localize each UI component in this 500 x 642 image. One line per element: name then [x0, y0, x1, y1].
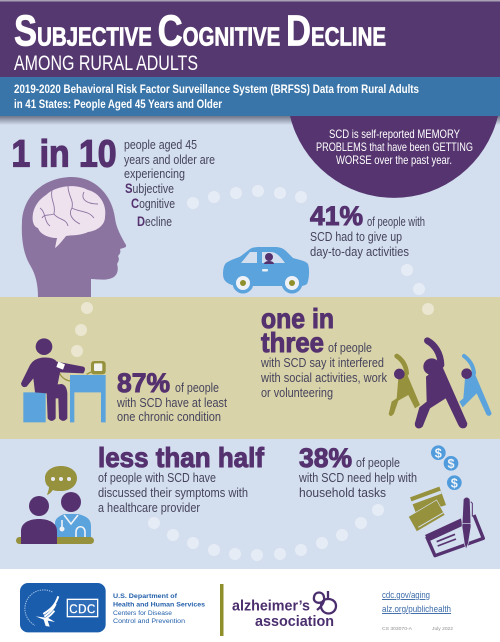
footer: CDC logo — [20, 583, 106, 632]
footer: links: cdc.gov/aging — [382, 590, 430, 601]
footer: Alzheimer's Association logo — [232, 591, 336, 630]
icon: three people stretching — [389, 341, 492, 429]
icon: head with brain — [22, 177, 126, 297]
stat: 1 in 10: 1 in 10 — [12, 134, 116, 176]
stat: less than half: a healthcare provider — [98, 500, 201, 515]
stat: one in three: with SCD say it interfered — [260, 355, 384, 370]
stat: 38 percent: of people — [356, 455, 400, 470]
footer: HHS text: Centers for Disease — [113, 610, 172, 617]
callout: SCD definition — [290, 116, 498, 198]
stat: one in three: of people — [328, 340, 372, 355]
callout: SCD definition: WORSE over the past year. — [336, 153, 452, 167]
stat: one in three: with social activities, work — [260, 370, 387, 385]
band: tan middle section — [0, 297, 500, 439]
stat: one in three: one in — [261, 303, 334, 334]
stat: 87 percent: one chronic condition — [117, 409, 221, 424]
footer: HHS text: Control and Prevention — [113, 618, 185, 625]
footer: HHS text — [113, 593, 205, 625]
subtitle band: in 41 States: People Aged 45 Years and Older — [14, 99, 222, 111]
stat: 38 percent — [298, 443, 417, 500]
stat: 1 in 10 — [12, 134, 215, 229]
stat: 1 in 10: Decline — [137, 213, 172, 229]
stat: 1 in 10: years and older are — [124, 152, 215, 167]
stat: 1 in 10: experiencing — [124, 166, 185, 181]
icon: car with driver — [223, 247, 309, 294]
stat: one in three — [260, 303, 387, 400]
stat: less than half: less than half — [98, 442, 265, 473]
icon: person with blood pressure monitor — [21, 338, 106, 422]
stat: 41 percent: of people with — [367, 214, 425, 229]
stat: 1 in 10: people aged 45 — [124, 137, 197, 152]
stat: less than half: discussed their symptoms with — [98, 485, 248, 500]
stat: 1 in 10: Cognitive — [131, 195, 175, 211]
stat: 41 percent — [310, 201, 425, 259]
stat: less than half: of people with SCD have — [98, 470, 216, 485]
icon: coins, cards, checkbook and pen: $ — [451, 476, 458, 490]
stat: 1 in 10: Subjective — [125, 180, 174, 196]
stat: 87 percent — [116, 368, 227, 424]
stat: 41 percent: SCD had to give up — [310, 229, 402, 244]
dotted path decoration — [71, 185, 434, 561]
stat: 38 percent: with SCD need help with — [298, 470, 417, 485]
subtitle band: 2019-2020 Behavioral Risk Factor Surveillance System (BRFSS) Data from Rural Adults — [14, 84, 419, 96]
stat: 38 percent: 38% — [299, 443, 352, 473]
subtitle band — [0, 77, 500, 116]
icon: coins, cards, checkbook and pen — [408, 445, 483, 556]
stat: 87 percent: of people — [175, 380, 219, 395]
icon: coins, cards, checkbook and pen: $ — [447, 457, 455, 471]
footer: links: July 2022 — [432, 626, 454, 631]
stat: 41 percent: 41% — [310, 201, 363, 231]
footer: links — [382, 590, 454, 631]
icon: patient and doctor talking — [16, 466, 94, 544]
stat: 38 percent: household tasks — [299, 485, 386, 500]
footer: links: CS 303070-A — [382, 626, 412, 631]
footer: HHS text: Health and Human Services — [113, 602, 205, 608]
stat: 87 percent: with SCD have at least — [116, 395, 227, 410]
footer: HHS text: U.S. Department of — [113, 593, 178, 600]
stat: one in three: or volunteering — [261, 385, 333, 400]
header: purple title banner: AMONG RURAL ADULTS — [14, 52, 198, 75]
footer: CDC logo: CDC — [69, 601, 96, 617]
header: purple title banner — [0, 0, 500, 77]
footer: Alzheimer's Association logo: association — [255, 613, 334, 630]
callout: SCD definition: SCD is self-reported MEMORY — [329, 127, 460, 141]
stat: less than half — [98, 442, 265, 515]
stat: 87 percent: 87% — [117, 368, 170, 398]
footer: links: alz.org/publichealth — [382, 604, 451, 615]
stat: one in three: three — [261, 327, 324, 358]
footer: Alzheimer's Association logo: alzheimer’s — [232, 598, 310, 614]
icon: coins, cards, checkbook and pen: $ — [435, 446, 442, 460]
stat: 41 percent: day-to-day activities — [310, 244, 409, 259]
header: purple title banner: SUBJECTIVE COGNITIVE DECLINE — [14, 6, 386, 56]
